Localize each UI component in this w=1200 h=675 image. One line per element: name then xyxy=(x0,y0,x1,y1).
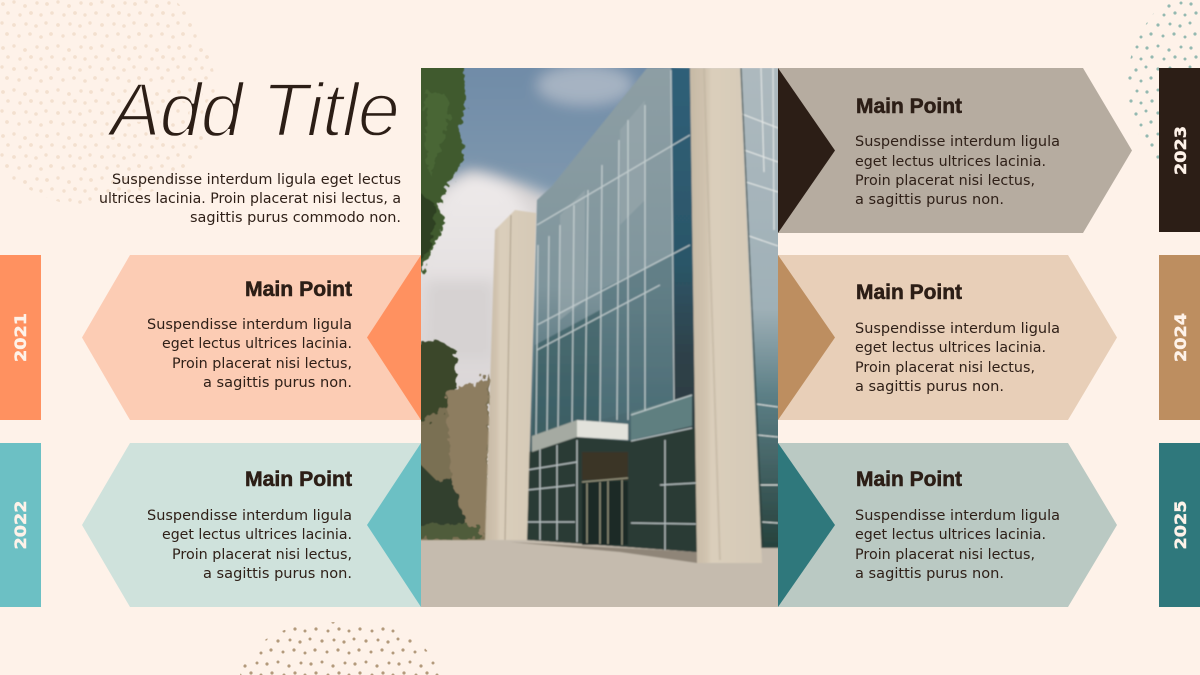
body text 2022: Suspendisse interdum ligula xyxy=(147,508,352,524)
year label 2021: 2021 xyxy=(11,313,30,362)
body text 2025: Proin placerat nisi lectus, xyxy=(855,547,1035,563)
sky base xyxy=(421,68,778,460)
body text 2021: eget lectus ultrices lacinia. xyxy=(162,336,352,352)
panel: 2021 xyxy=(0,255,421,420)
panel: 2023 xyxy=(778,68,1200,233)
decorative dot cluster: top right xyxy=(1127,0,1200,178)
arrow notch 2025 xyxy=(778,443,835,607)
heading 2023: Main Point xyxy=(856,95,962,118)
body text 2022: eget lectus ultrices lacinia. xyxy=(162,527,352,543)
right glass wing xyxy=(740,68,778,549)
arrow notch 2021 xyxy=(367,255,421,420)
sky and clouds xyxy=(421,68,682,278)
heading 2024: Main Point xyxy=(856,281,962,304)
body text 2021: a sagittis purus non. xyxy=(203,375,352,391)
ground xyxy=(416,540,782,612)
year label 2025: 2025 xyxy=(1171,500,1190,550)
heading 2021: Main Point xyxy=(245,278,352,301)
facade mullions xyxy=(527,70,696,550)
body text 2024: a sagittis purus non. xyxy=(855,379,1004,395)
arrow shape 2023 xyxy=(778,68,1132,233)
title: Add Title xyxy=(106,68,400,153)
decorative dot cluster: bottom xyxy=(240,622,440,675)
year tab 2021 xyxy=(0,255,41,420)
body text 2023: eget lectus ultrices lacinia. xyxy=(855,154,1046,170)
intro text block: ultrices lacinia. Proin placerat nisi lectus, a xyxy=(99,191,401,207)
body text 2021: Suspendisse interdum ligula xyxy=(147,317,352,333)
arrow shape 2024 xyxy=(778,255,1117,420)
body text 2021 xyxy=(147,317,352,391)
arrow notch 2024 xyxy=(778,255,835,420)
photo: glass office building xyxy=(421,68,778,607)
pale band under canopy xyxy=(631,395,692,440)
body text 2022: a sagittis purus non. xyxy=(203,566,352,582)
body text 2022: Proin placerat nisi lectus, xyxy=(172,547,352,563)
year label 2022: 2022 xyxy=(11,500,30,550)
heading 2022: Main Point xyxy=(245,468,352,491)
body text 2023 xyxy=(855,134,1060,208)
year tab 2022 xyxy=(0,443,41,607)
dark strip of glass xyxy=(670,68,696,432)
shadow under entrance xyxy=(510,542,697,563)
arrow shape 2021 xyxy=(82,255,421,420)
tree top left xyxy=(416,60,467,272)
panel: 2025 xyxy=(778,443,1200,607)
heading 2025: Main Point xyxy=(856,468,962,491)
arrow notch 2022 xyxy=(367,443,421,607)
panel: 2024 xyxy=(778,255,1200,420)
right pillar xyxy=(690,68,762,563)
year label 2024: 2024 xyxy=(1171,313,1190,362)
body text 2025: eget lectus ultrices lacinia. xyxy=(855,527,1046,543)
arrow shape 2022 xyxy=(82,443,421,607)
entrance door xyxy=(582,481,628,545)
year label 2023: 2023 xyxy=(1171,126,1190,175)
intro text block: Suspendisse interdum ligula eget lectus xyxy=(112,172,401,188)
left pillar xyxy=(485,210,536,540)
year tab 2024 xyxy=(1159,255,1200,420)
body text 2023: Suspendisse interdum ligula xyxy=(855,134,1060,150)
body text 2023: a sagittis purus non. xyxy=(855,192,1004,208)
arrow shape 2025 xyxy=(778,443,1117,607)
body text 2021: Proin placerat nisi lectus, xyxy=(172,356,352,372)
body text 2024: Suspendisse interdum ligula xyxy=(855,321,1060,337)
intro text block xyxy=(99,172,401,226)
body text 2025 xyxy=(855,508,1060,582)
body text 2025: Suspendisse interdum ligula xyxy=(855,508,1060,524)
body text 2022 xyxy=(147,508,352,582)
trees lower left xyxy=(416,338,490,545)
body text 2024 xyxy=(855,321,1060,395)
body text 2025: a sagittis purus non. xyxy=(855,566,1004,582)
glass facade xyxy=(527,68,697,552)
arrow notch 2023 xyxy=(778,68,835,233)
body text 2024: eget lectus ultrices lacinia. xyxy=(855,340,1046,356)
year tab 2025 xyxy=(1159,443,1200,607)
panel: 2022 xyxy=(0,443,421,607)
glass reflections xyxy=(532,100,675,450)
year tab 2023 xyxy=(1159,68,1200,232)
body text 2023: Proin placerat nisi lectus, xyxy=(855,173,1035,189)
decorative dot cluster: top left xyxy=(0,0,215,206)
canopy over door xyxy=(577,420,628,440)
body text 2024: Proin placerat nisi lectus, xyxy=(855,360,1035,376)
dark lower storey xyxy=(527,428,697,552)
intro text block: sagittis purus commodo non. xyxy=(190,210,401,226)
